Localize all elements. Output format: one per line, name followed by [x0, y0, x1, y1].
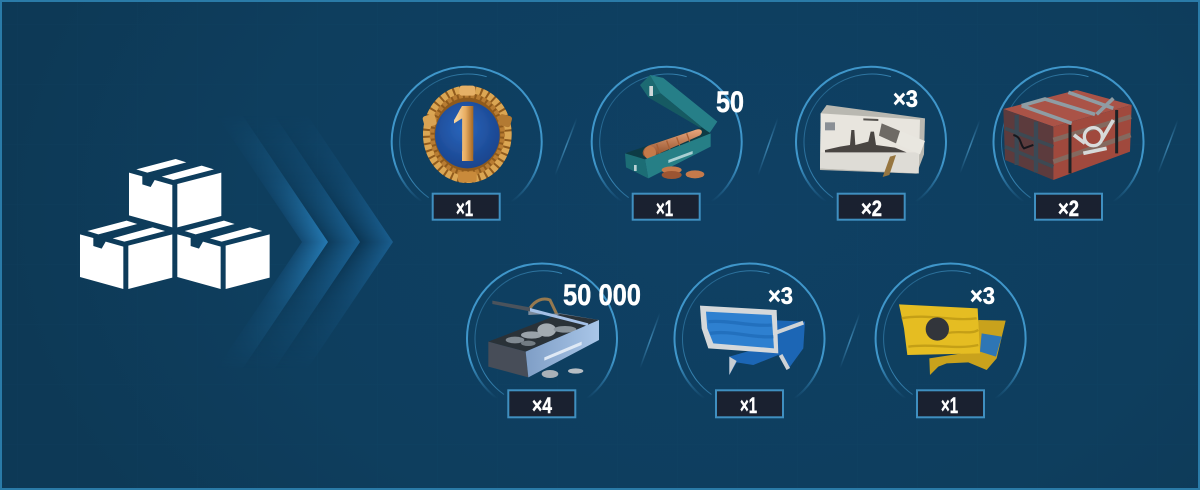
icon: top box [129, 159, 221, 227]
multiplier label: ×3 [970, 283, 995, 310]
count badge: ×1 [740, 393, 757, 418]
icon: lower right box [177, 221, 270, 289]
silver box icon [488, 299, 599, 378]
count badge: ×2 [1058, 196, 1079, 221]
chevron arrows [251, 134, 393, 348]
multiplier label: ×3 [768, 283, 793, 310]
reward: blue signal flag [674, 264, 824, 418]
ring [674, 264, 824, 398]
crate icon [1003, 90, 1132, 180]
ring [994, 67, 1144, 202]
reward: credits box [467, 264, 641, 418]
count badge: ×2 [861, 196, 882, 221]
medal icon: 1 [445, 89, 490, 178]
count badge: ×1 [941, 393, 958, 418]
icon: lower left box [80, 221, 172, 289]
teal box icon [625, 75, 717, 179]
count badge [508, 390, 575, 418]
count badge [838, 194, 905, 221]
reward: level 1 commander medal [392, 67, 542, 221]
reward: yellow signal flag [876, 264, 1026, 418]
icon: stacked boxes [80, 159, 270, 289]
amount label: 50 [716, 86, 744, 119]
yellow flag icon [899, 304, 1006, 375]
reward: doubloons box [592, 67, 744, 221]
count badge [1035, 194, 1102, 221]
separator slashes [555, 118, 1178, 368]
reward: red supply crate [994, 67, 1144, 221]
count badge: ×4 [532, 393, 553, 418]
ring [467, 264, 617, 398]
count badge [633, 194, 700, 221]
medal icon [422, 86, 513, 183]
amount label: 50 000 [563, 279, 641, 312]
ring [876, 264, 1026, 398]
count badge [716, 390, 783, 418]
count badge: ×1 [456, 196, 473, 221]
multiplier label: ×3 [893, 86, 918, 113]
blue flag icon [700, 306, 805, 375]
count badge [433, 194, 500, 221]
count badge [917, 390, 984, 418]
blueprint icon [820, 105, 925, 177]
reward: camouflage blueprints [796, 67, 946, 221]
ring [592, 67, 742, 202]
count badge: ×1 [656, 196, 673, 221]
ring [796, 67, 946, 202]
ring [392, 67, 542, 202]
